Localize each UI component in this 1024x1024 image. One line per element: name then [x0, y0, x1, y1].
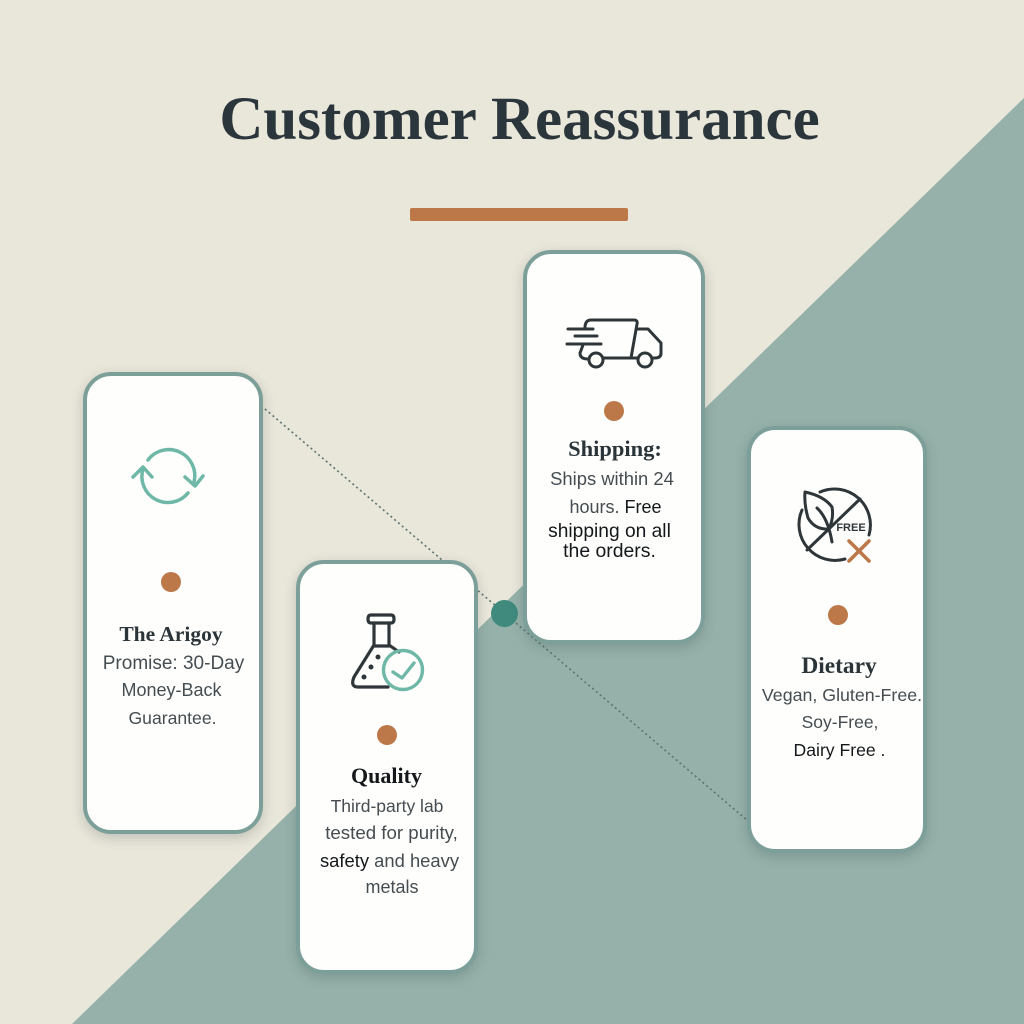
- dietary text: [762, 653, 922, 760]
- bullet dot: [604, 401, 624, 421]
- icon: delivery truck: [566, 318, 662, 368]
- bullet dot: [377, 725, 397, 745]
- quality text: metals: [365, 877, 419, 897]
- bullet dot: [828, 605, 848, 625]
- shipping text: shipping on all: [548, 521, 671, 542]
- dietary text: Dairy Free .: [794, 740, 885, 760]
- quality text: tested for purity,: [325, 822, 458, 843]
- promise text: The Arigoy: [119, 622, 223, 646]
- promise text: Promise: 30-Day: [103, 653, 244, 674]
- quality text: safety and heavy: [320, 850, 459, 871]
- icon: leaf free badge: [797, 488, 872, 563]
- panel: shipping: [523, 250, 705, 644]
- icon: leaf free badge: FREE: [836, 522, 866, 534]
- icon: refresh arrows: [131, 448, 205, 504]
- panel: dietary: [747, 426, 927, 853]
- quality text: [320, 763, 459, 897]
- quality text: Third-party lab: [331, 796, 443, 816]
- shipping text: the orders.: [563, 540, 656, 562]
- bullet dot: [161, 572, 181, 592]
- icon: flask with check: [351, 613, 424, 692]
- shipping text: Ships within 24: [550, 468, 674, 489]
- quality text: Quality: [351, 763, 422, 788]
- title accent bar: [410, 208, 628, 221]
- title: Customer Reassurance: [219, 86, 820, 153]
- panel: quality: [296, 560, 478, 974]
- promise text: [103, 622, 244, 728]
- dietary text: Soy-Free,: [802, 712, 878, 732]
- shipping text: Shipping:: [568, 436, 662, 461]
- promise text: Guarantee.: [128, 708, 217, 728]
- dietary text: Dietary: [801, 653, 877, 679]
- dietary text: Vegan, Gluten-Free.: [762, 685, 922, 705]
- promise text: Money-Back: [121, 680, 222, 700]
- shipping text: [548, 436, 674, 562]
- shipping text: hours. Free: [569, 497, 662, 517]
- panel: promise: [83, 372, 263, 834]
- connector node: [491, 600, 518, 627]
